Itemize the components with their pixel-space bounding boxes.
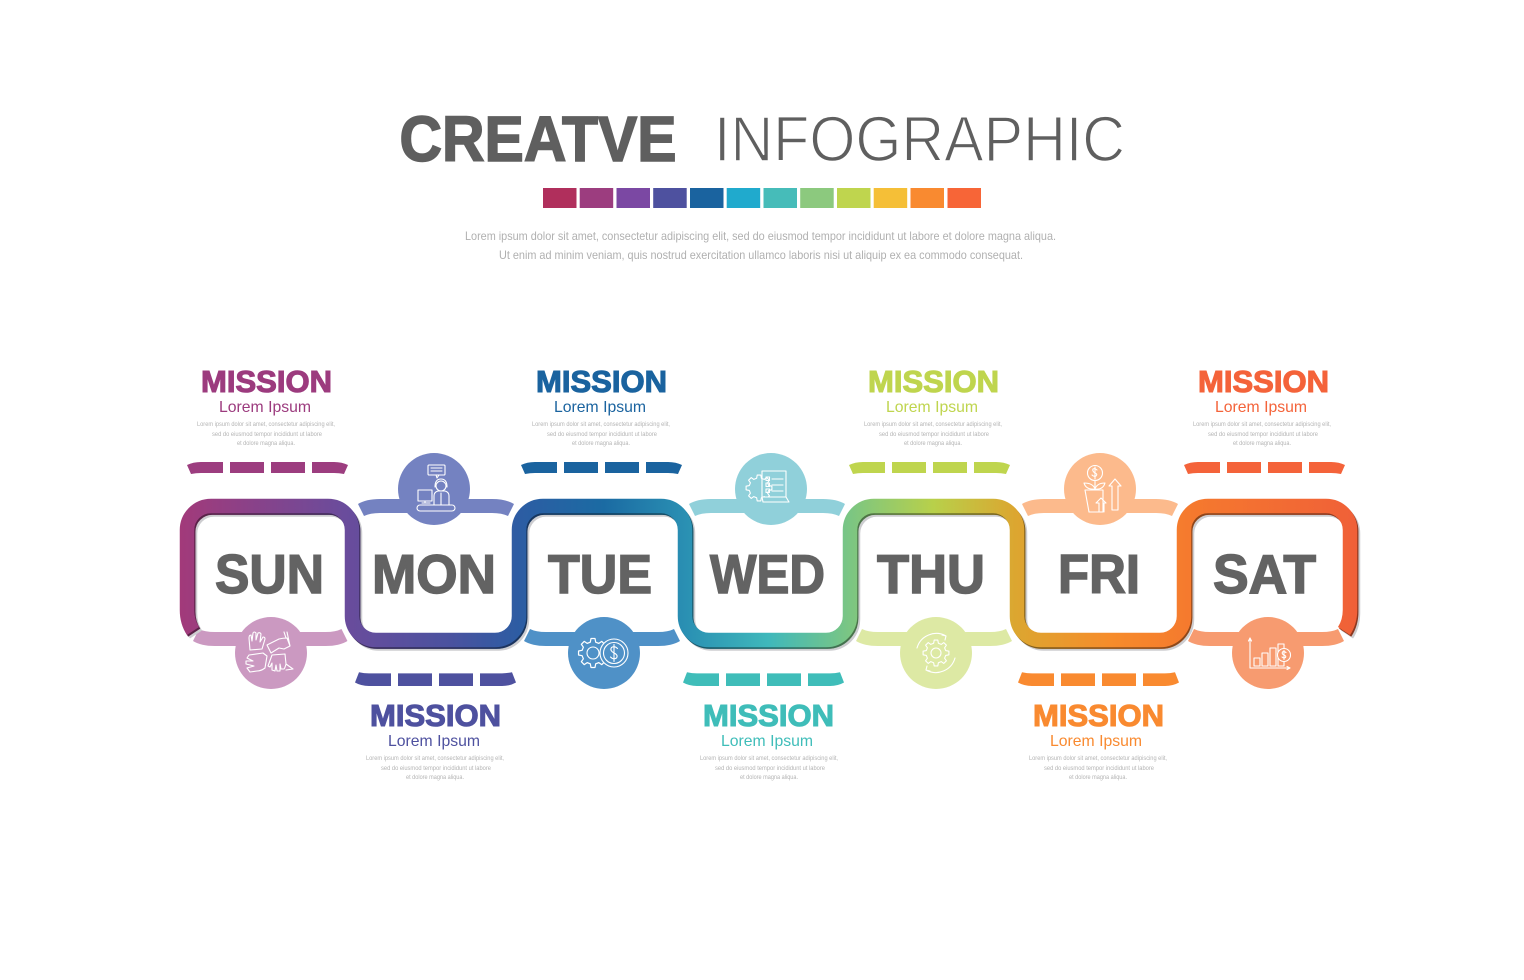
text block: MON mission — [366, 698, 504, 781]
text block: SAT mission: et dolore magna aliqua. — [1233, 440, 1291, 447]
icon: checklist and gear (WED) — [735, 453, 807, 525]
text block: FRI mission: sed do eiusmod tempor incididunt ut labore — [1044, 765, 1154, 772]
text block: SAT mission — [1193, 364, 1331, 447]
text block: MON mission: et dolore magna aliqua. — [406, 774, 464, 781]
intro text: Ut enim ad minim veniam, quis nostrud exercitation ullamco laboris nisi ut aliquip ex ea commodo consequat. — [499, 248, 1023, 262]
dashed bar: FRI — [1018, 672, 1179, 686]
text block: SUN mission: Lorem ipsum dolor sit amet, consectetur adipiscing elit, — [197, 421, 335, 428]
text block: FRI mission: Lorem ipsum dolor sit amet, consectetur adipiscing elit, — [1029, 755, 1167, 762]
text block: WED mission: sed do eiusmod tempor incididunt ut labore — [715, 765, 825, 772]
text block: TUE mission: Lorem ipsum dolor sit amet, consectetur adipiscing elit, — [532, 421, 670, 428]
dashed bar: MON — [355, 672, 516, 686]
text block: SUN mission: MISSION — [201, 364, 332, 399]
text block: FRI mission: MISSION — [1033, 698, 1164, 733]
secondary ribbon strip: TUE — [524, 629, 680, 646]
text block: FRI mission: et dolore magna aliqua. — [1069, 774, 1127, 781]
text block: SAT mission: sed do eiusmod tempor incididunt ut labore — [1208, 431, 1318, 438]
text block: TUE mission: Lorem Ipsum — [554, 399, 646, 416]
text block: THU mission: et dolore magna aliqua. — [904, 440, 962, 447]
text block: SUN mission — [197, 364, 335, 447]
text block: SAT mission: MISSION — [1198, 364, 1329, 399]
day label: TUE: TUE — [548, 543, 652, 605]
icon: gear with circular arrows (THU) — [900, 617, 972, 689]
colour swatch strip — [543, 188, 981, 208]
dashed bar: SAT — [1184, 462, 1345, 474]
text block: SUN mission: sed do eiusmod tempor incididunt ut labore — [212, 431, 322, 438]
secondary ribbon strip: MON — [358, 499, 514, 516]
text block: SAT mission: Lorem ipsum dolor sit amet, consectetur adipiscing elit, — [1193, 421, 1331, 428]
day label: FRI: FRI — [1058, 543, 1140, 605]
text block: FRI mission: Lorem Ipsum — [1050, 733, 1142, 750]
text block: THU mission: Lorem ipsum dolor sit amet, consectetur adipiscing elit, — [864, 421, 1002, 428]
text block: WED mission: MISSION — [703, 698, 834, 733]
dashed bar: TUE — [521, 462, 682, 474]
intro text — [465, 229, 1056, 262]
text block: MON mission: MISSION — [370, 698, 501, 733]
text block: THU mission: Lorem Ipsum — [886, 399, 978, 416]
main serpentine ribbon — [187, 506, 1353, 644]
day label: SUN: SUN — [215, 543, 324, 605]
title — [400, 103, 1125, 175]
text block: THU mission: MISSION — [868, 364, 999, 399]
text block: SUN mission: et dolore magna aliqua. — [237, 440, 295, 447]
secondary ribbon strip: SUN — [193, 629, 347, 646]
title: CREATVE — [400, 103, 676, 175]
icon: gear and dollar coin (TUE) — [568, 617, 640, 689]
day label: THU: THU — [877, 543, 985, 605]
title: INFOGRAPHIC — [714, 103, 1125, 175]
dashed bar: SUN — [187, 462, 348, 474]
text block: TUE mission: et dolore magna aliqua. — [572, 440, 630, 447]
text block: THU mission — [864, 364, 1002, 447]
dashed bar: WED — [683, 672, 844, 686]
text block: MON mission: Lorem ipsum dolor sit amet, consectetur adipiscing elit, — [366, 755, 504, 762]
text block: TUE mission: MISSION — [536, 364, 667, 399]
text block: TUE mission: sed do eiusmod tempor incididunt ut labore — [547, 431, 657, 438]
secondary ribbon strip: FRI — [1022, 499, 1178, 516]
text block: MON mission: sed do eiusmod tempor incididunt ut labore — [381, 765, 491, 772]
text block: MON mission: Lorem Ipsum — [388, 733, 480, 750]
day label: SAT: SAT — [1213, 543, 1316, 605]
icon: bar chart with coin (SAT) — [1232, 617, 1304, 689]
text block: WED mission: et dolore magna aliqua. — [740, 774, 798, 781]
day label: MON: MON — [372, 543, 496, 605]
text block: WED mission: Lorem ipsum dolor sit amet, consectetur adipiscing elit, — [700, 755, 838, 762]
text block: FRI mission — [1029, 698, 1167, 781]
secondary ribbon strip: WED — [689, 499, 845, 516]
text block: WED mission — [700, 698, 838, 781]
text block: SAT mission: Lorem Ipsum — [1215, 399, 1307, 416]
text block: WED mission: Lorem Ipsum — [721, 733, 813, 750]
icon: joined hands (SUN) — [235, 617, 307, 689]
secondary ribbon strip: THU — [856, 629, 1012, 646]
icon: support person at computer (MON) — [398, 453, 470, 525]
dashed bar: THU — [849, 462, 1010, 474]
icon: money plant and growth arrow (FRI) — [1064, 453, 1136, 525]
text block: THU mission: sed do eiusmod tempor incididunt ut labore — [879, 431, 989, 438]
day label: WED: WED — [710, 543, 825, 605]
secondary ribbon strip: SAT — [1188, 629, 1344, 646]
text block: SUN mission: Lorem Ipsum — [219, 399, 311, 416]
text block: TUE mission — [532, 364, 670, 447]
intro text: Lorem ipsum dolor sit amet, consectetur adipiscing elit, sed do eiusmod tempor incididunt ut labore et dolore magna aliqua. — [465, 229, 1056, 243]
